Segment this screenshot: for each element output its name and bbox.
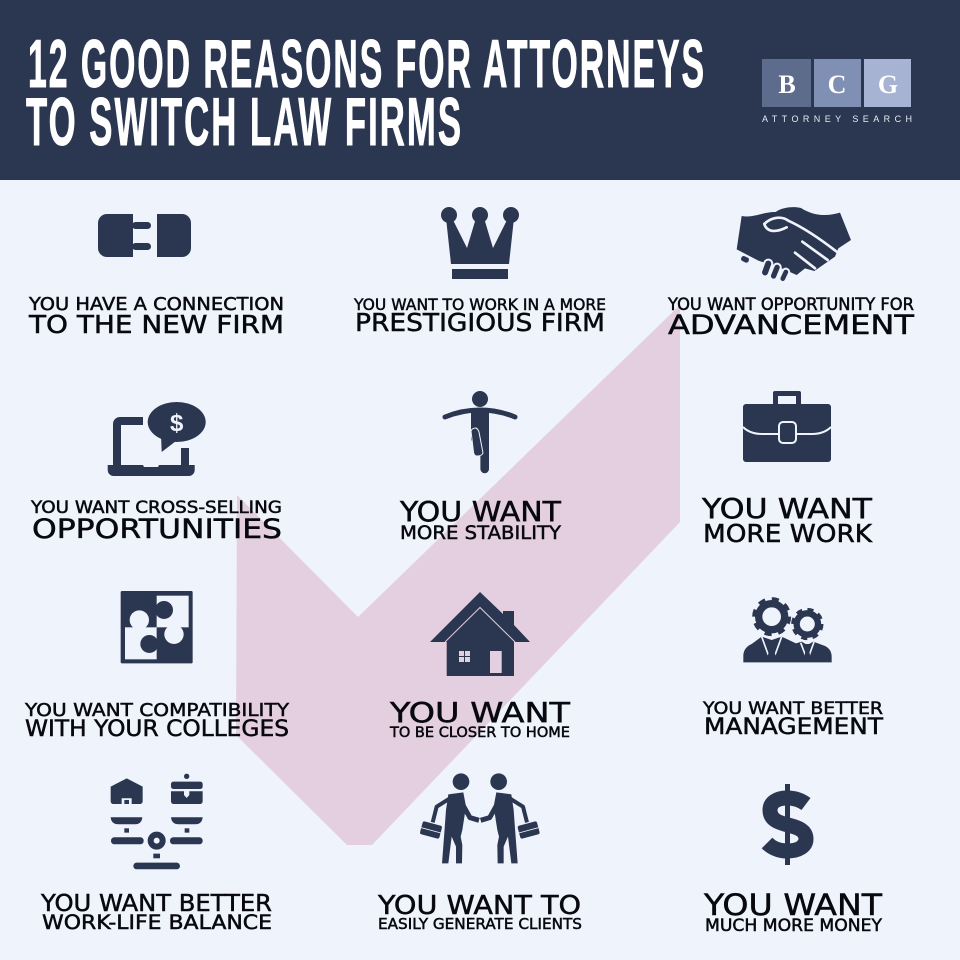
logo: BCG Attorney Search: G — [878, 70, 898, 99]
caption: ADVANCEMENT — [668, 310, 915, 341]
logo: BCG Attorney Search: ATTORNEY SEARCH — [762, 114, 912, 124]
caption: YOU WANT TO WORK IN A MORE — [353, 295, 606, 314]
caption: WORK-LIFE BALANCE — [42, 911, 272, 934]
caption — [40, 891, 272, 934]
caption: YOU WANT BETTER — [702, 699, 883, 719]
caption: YOU HAVE A CONNECTION — [28, 294, 284, 315]
caption — [28, 294, 284, 339]
caption: MORE WORK — [703, 519, 873, 548]
caption — [702, 699, 884, 740]
right man — [481, 773, 540, 863]
caption — [377, 891, 582, 933]
panel: generate clients — [377, 773, 582, 933]
left man — [420, 773, 479, 863]
icon: puzzle — [121, 591, 193, 663]
icon: gear-headed managers — [743, 599, 832, 662]
logo: BCG Attorney Search — [762, 59, 912, 124]
panel: compatibility — [24, 591, 290, 742]
title: TO SWITCH LAW FIRMS — [26, 84, 463, 160]
title — [26, 26, 706, 160]
caption — [24, 700, 290, 742]
header banner — [0, 0, 960, 180]
panel: advancement — [667, 207, 915, 341]
caption: MORE STABILITY — [400, 522, 561, 544]
panel: cross-selling — [30, 402, 282, 545]
caption — [399, 495, 562, 544]
icon: plug — [98, 214, 191, 257]
caption — [353, 295, 606, 337]
caption: TO THE NEW FIRM — [28, 310, 284, 339]
icon: laptop with dollar bubble — [108, 402, 206, 476]
icon: house — [430, 592, 530, 676]
logo: BCG Attorney Search: B — [778, 70, 796, 99]
icon: briefcase — [743, 391, 831, 462]
caption: YOU WANT BETTER — [40, 891, 272, 917]
panel: management — [702, 599, 884, 740]
icon: handshake — [737, 207, 851, 283]
icon: dollar sign — [767, 784, 806, 865]
caption: YOU WANT TO — [377, 891, 581, 921]
caption — [30, 498, 282, 545]
panel: more money — [703, 784, 883, 935]
caption — [667, 295, 915, 341]
panel: connection — [28, 214, 284, 339]
caption: YOU WANT — [701, 492, 873, 525]
caption: YOU WANT — [703, 888, 882, 922]
caption: MANAGEMENT — [704, 715, 884, 740]
icon: balance scale — [111, 774, 203, 869]
icon: balancing figure — [445, 391, 515, 473]
caption: OPPORTUNITIES — [32, 514, 282, 545]
caption: PRESTIGIOUS FIRM — [355, 308, 605, 337]
background checkmark — [236, 305, 680, 845]
caption: YOU WANT COMPATIBILITY — [24, 700, 290, 721]
caption: WITH YOUR COLLEGES — [25, 717, 289, 742]
caption: YOU WANT — [389, 696, 571, 729]
caption: MUCH MORE MONEY — [705, 916, 883, 935]
caption: YOU WANT OPPORTUNITY FOR — [667, 295, 914, 314]
panel: closer to home — [389, 592, 571, 741]
panel: stability — [399, 391, 562, 544]
icon: two men shaking hands — [420, 773, 540, 863]
caption: TO BE CLOSER TO HOME — [389, 725, 570, 741]
panel: prestige — [353, 207, 606, 337]
caption — [703, 888, 883, 935]
caption: YOU WANT — [399, 495, 562, 528]
logo: BCG Attorney Search: C — [828, 70, 846, 99]
panel: work-life balance — [40, 774, 272, 934]
caption — [701, 492, 873, 548]
panel: more work — [701, 391, 873, 548]
icon: laptop with dollar bubble: $ — [170, 410, 184, 437]
caption: YOU WANT CROSS-SELLING — [30, 498, 282, 517]
caption — [389, 696, 571, 741]
icon: crown — [441, 207, 519, 279]
caption: EASILY GENERATE CLIENTS — [378, 915, 582, 933]
